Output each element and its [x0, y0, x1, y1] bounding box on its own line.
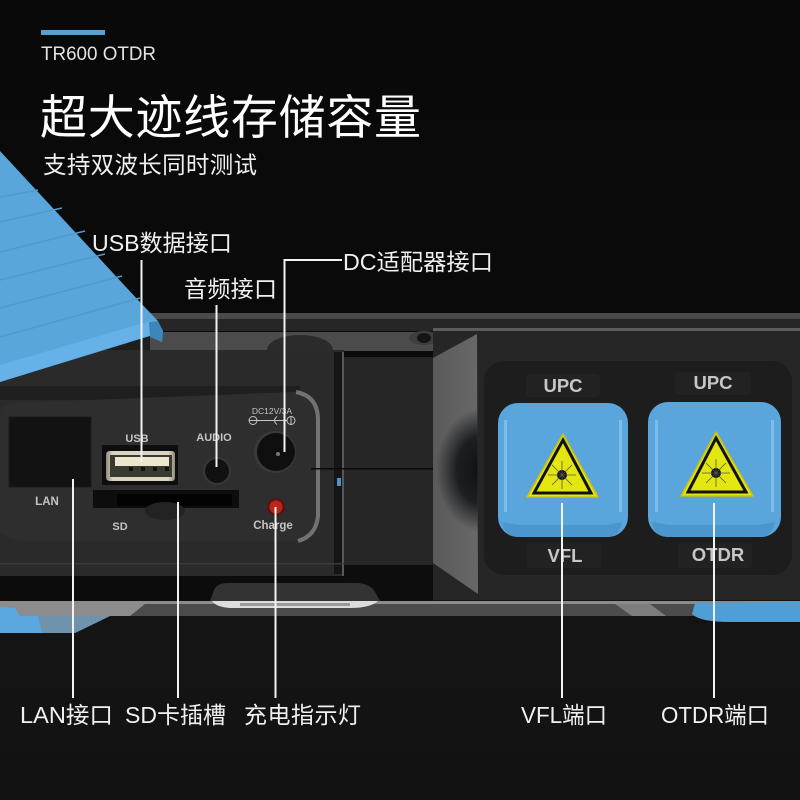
laser warning icon	[681, 432, 753, 496]
blue bumper: lower left	[0, 607, 110, 633]
DC power port: DC12V/3A	[252, 406, 292, 416]
leader line: charge	[274, 507, 276, 698]
USB port	[102, 433, 178, 485]
SD slot	[93, 490, 239, 533]
product name: TR600 OTDR	[41, 43, 156, 65]
left port housing	[0, 350, 344, 602]
label: USB: USB数据接口	[92, 230, 232, 256]
USB port: USB	[125, 433, 149, 445]
label: LAN: LAN接口	[20, 702, 113, 728]
audio port: AUDIO	[196, 432, 232, 444]
connector labels	[526, 372, 752, 568]
audio port	[196, 432, 232, 485]
leader line: USB	[140, 260, 142, 462]
leader line: audio	[216, 305, 218, 467]
header accent bar	[41, 30, 105, 35]
connector labels: UPC	[543, 375, 583, 396]
leader line: SD	[177, 502, 179, 698]
middle block	[311, 357, 481, 602]
connector labels: OTDR	[692, 544, 744, 565]
right connector housing	[433, 331, 800, 600]
leader line: LAN	[72, 479, 74, 698]
connector labels: UPC	[693, 372, 733, 393]
label: VFL: VFL端口	[521, 702, 607, 728]
label: DC: DC适配器接口	[343, 249, 493, 275]
leader line: OTDR	[713, 503, 715, 698]
LAN port	[9, 417, 91, 508]
leader line: DC	[284, 260, 342, 452]
OTDR connector cap	[648, 402, 781, 537]
title: 超大迹线存储容量	[40, 91, 421, 144]
blue bumper: lower right	[692, 602, 800, 622]
label: OTDR: OTDR端口	[661, 702, 769, 728]
blue bumper: upper left	[0, 151, 163, 382]
VFL connector cap	[498, 403, 628, 537]
connector labels: VFL	[548, 545, 582, 566]
label: audio: 音频接口	[184, 276, 277, 302]
charge LED: Charge	[253, 520, 293, 532]
DC power port	[249, 406, 296, 473]
subtitle: 支持双波长同时测试	[43, 152, 257, 178]
label: charge: 充电指示灯	[244, 702, 361, 728]
leader line: VFL	[561, 503, 563, 698]
LAN port: LAN	[35, 496, 59, 508]
SD slot: SD	[112, 521, 128, 533]
laser warning icon	[527, 434, 598, 497]
charge LED	[253, 498, 293, 532]
device top rail	[0, 313, 800, 365]
device: OTDR connector panel	[0, 151, 800, 633]
lower rail	[0, 583, 800, 616]
label: SD: SD卡插槽	[125, 702, 226, 728]
